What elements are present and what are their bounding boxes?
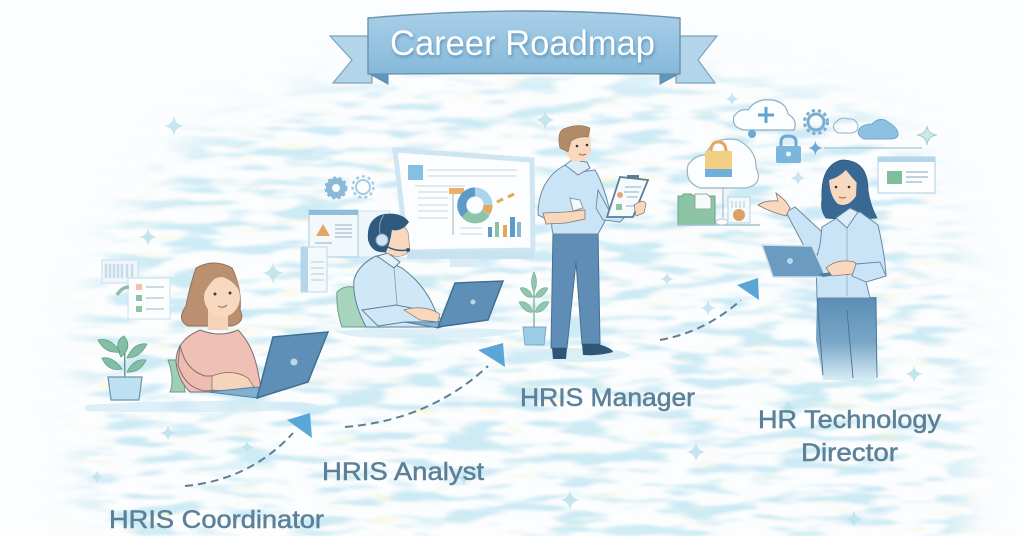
icon: small clouds [833,118,898,139]
arm right [596,190,628,222]
face [204,277,240,317]
background: watercolor texture [66,64,984,536]
big dashboard monitor [395,150,534,267]
neck [208,310,228,330]
arm [362,305,440,326]
shadow: manager feet [520,348,630,362]
headset [376,215,410,252]
torso [176,330,262,392]
label: HR Technology Director: HR Technology [758,406,942,434]
person: HR technology director [758,160,886,380]
raised arm [786,207,830,260]
face [376,221,410,256]
title banner [330,11,717,84]
label: HR Technology Director: Director [801,439,898,467]
title text: Career Roadmap [391,26,656,65]
title text: Career Roadmap [390,24,655,63]
laptop [208,387,270,398]
clipboard [607,177,648,217]
monitor blue square [408,165,423,180]
pants [816,297,877,380]
torso [354,256,440,327]
app window: right [878,157,935,193]
banner ribbon [368,11,680,74]
arrow: coordinator to analyst [185,413,312,486]
banner right tail [676,36,717,83]
hand and phone [570,198,583,211]
plant: manager [519,272,549,345]
desk line: coordinator to analyst [335,328,522,338]
narrow document [301,247,327,292]
torso [538,165,610,234]
pants [551,232,600,348]
arrow: analyst to manager [345,343,505,427]
shelf with folder and certificate [678,194,760,225]
torso [816,212,886,298]
face [562,130,591,162]
laptop [762,245,826,277]
monitor orange marker [449,188,464,194]
shoes [552,344,613,359]
arrow: manager to director [660,278,759,340]
hair back [822,160,877,220]
hair [368,214,409,252]
icon: gears [326,176,374,198]
label: HRIS Manager: HRIS Manager [520,384,695,412]
icon: blue lock [776,136,801,163]
connector star line [808,126,937,156]
collar [565,160,590,175]
face [829,169,857,205]
chair [337,287,368,327]
person: HRIS coordinator [168,263,328,398]
person: HRIS analyst [337,214,503,328]
background sparkle stars [90,92,923,528]
arm [178,345,244,391]
documents behind coordinator [102,260,170,319]
icon: gear [804,110,828,134]
collar [836,208,858,228]
alert window [309,210,390,257]
banner folds [368,73,680,84]
raised hand [758,193,790,216]
banner left tail [330,36,372,83]
desk shadow: coordinator [85,401,318,412]
icon: cloud with lock [687,139,758,218]
icon: top cloud with plus [733,100,795,138]
hair back [181,263,242,326]
hand on laptop [826,261,862,276]
label: HR Technology Director [758,406,942,467]
plant: coordinator desk [98,336,147,400]
label: HRIS Analyst: HRIS Analyst [322,458,484,486]
chair [168,360,185,392]
collar [377,253,400,268]
person: HRIS manager [538,126,648,359]
donut chart [462,192,488,219]
label: HRIS Coordinator: HRIS Coordinator [109,506,324,534]
bar chart [488,217,521,237]
hair [559,126,590,152]
yellow lock [705,142,732,177]
laptop [405,318,470,328]
